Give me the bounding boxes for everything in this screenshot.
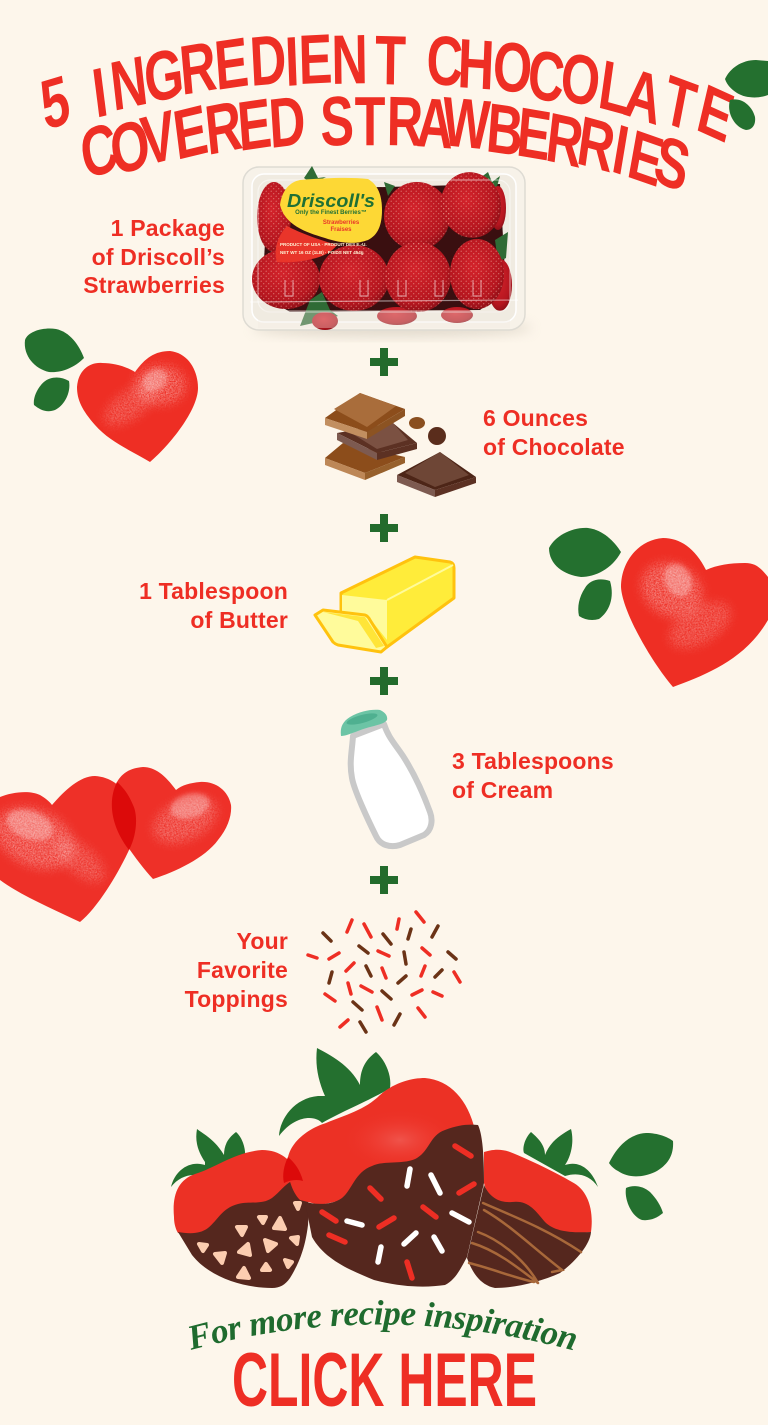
illustration: three chocolate dipped strawberries — [171, 1048, 598, 1288]
package red sublabel: PRODUCT OF USA · PRODUIT DES É.-U. — [280, 240, 367, 247]
label: toppings: Favorite — [197, 957, 288, 983]
package lid reflections — [250, 180, 518, 312]
overlap of left and center strawberries — [283, 1157, 303, 1183]
ingredient: toppings sprinkles — [308, 912, 460, 1032]
decoration: heart with leaves, right — [549, 528, 768, 687]
package yellow label: Strawberries — [323, 220, 360, 226]
ingredient: chocolate pieces — [325, 393, 476, 497]
package red sublabel: NET WT 16 OZ (1LB) · POIDS NET 454g — [280, 250, 364, 255]
ingredient: butter — [315, 557, 454, 652]
ingredient: strawberry package photo illustration — [243, 165, 532, 337]
label: chocolate: 6 Ounces — [483, 405, 588, 431]
call to action button text: CLICK HERE — [232, 1338, 537, 1423]
label: toppings: Your — [237, 928, 288, 954]
decoration: two overlapping hearts — [0, 767, 231, 922]
label: strawberries: of Driscoll’s — [92, 244, 225, 270]
milk chocolate square, top — [325, 393, 405, 439]
title: 5 INGREDIENT CHOCOLATE — [36, 19, 741, 158]
dark chocolate square, right — [397, 452, 476, 497]
strawberry center: sprinkles — [279, 1048, 484, 1287]
label: strawberries: Strawberries — [83, 272, 225, 298]
package yellow label: Fraises — [330, 227, 352, 233]
label: cream: of Cream — [452, 777, 553, 803]
label: chocolate: of Chocolate — [483, 434, 625, 460]
package yellow label: Driscoll's — [287, 191, 375, 211]
label: cream: 3 Tablespoons — [452, 748, 614, 774]
label: strawberries: 1 Package — [111, 215, 225, 241]
strawberry right: caramel drizzle — [467, 1129, 598, 1288]
ingredient: cream bottle — [341, 710, 432, 846]
plus sign 4 — [370, 866, 398, 894]
plus sign 3 — [370, 667, 398, 695]
dark chocolate square, middle — [337, 423, 417, 460]
label: toppings: Toppings — [185, 986, 288, 1012]
label: butter: 1 Tablespoon — [139, 578, 288, 604]
plus sign 2 — [370, 514, 398, 542]
package yellow label: Only the Finest Berries™ — [295, 209, 367, 216]
strawberry left: chips — [171, 1129, 309, 1288]
decoration: heart with leaves, left — [25, 328, 198, 462]
package bottom plastic haze — [258, 310, 510, 328]
call to action script line: For more recipe inspiration — [188, 1300, 576, 1350]
chocolate drops — [409, 417, 446, 445]
label: butter: of Butter — [190, 607, 288, 633]
icon: leaves top right — [725, 60, 768, 130]
title: COVERED STRAWBERRIES — [74, 81, 696, 207]
package red sublabel — [276, 226, 367, 262]
icon: leaves bottom right — [609, 1133, 673, 1220]
package yellow label — [280, 178, 382, 243]
milk chocolate square, lower — [325, 443, 405, 480]
plus sign 1 — [370, 348, 398, 376]
